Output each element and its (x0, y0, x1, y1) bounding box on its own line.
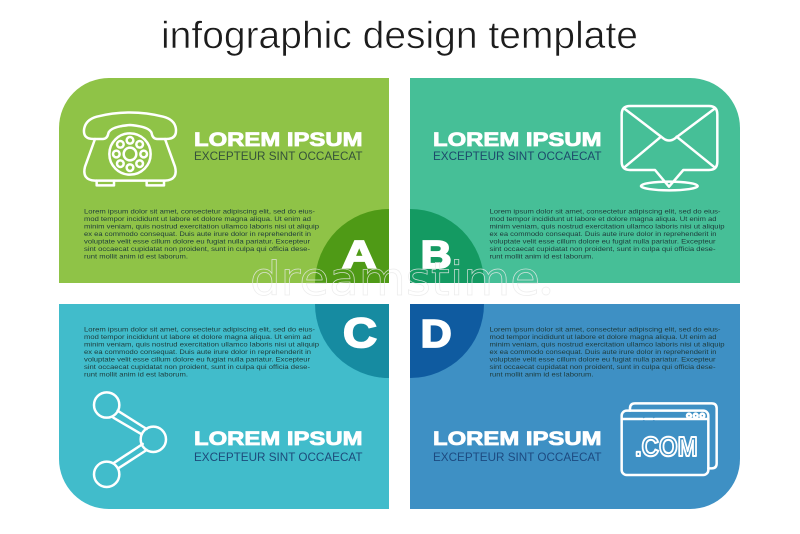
body text C: sint occaecat cupidatat non proident, sunt in culpa qui officia dese- (84, 364, 310, 371)
body text D: voluptate velit esse cillum dolore eu fugiat nulla pariatur. Excepteur (490, 356, 716, 364)
body text A: voluptate velit esse cillum dolore eu fugiat nulla pariatur. Excepteur (84, 238, 311, 246)
body text B (490, 208, 725, 260)
body text A: runt mollit anim id est laborum. (84, 254, 188, 260)
body text B: runt mollit anim id est laborum. (490, 254, 594, 260)
body text C: voluptate velit esse cillum dolore eu fugiat nulla pariatur. Excepteur (84, 356, 311, 364)
watermark: dreamstime (250, 252, 540, 306)
body text C (84, 326, 319, 378)
body text D: runt mollit anim id est laborum. (490, 372, 594, 378)
icon: share nodes (94, 392, 166, 487)
heading D: LOREM IPSUM (433, 428, 602, 450)
badge letter B: B (421, 234, 452, 277)
panel: D (410, 304, 740, 509)
body text C: Lorem ipsum dolor sit amet, consectetur adipiscing elit, sed do eius- (84, 326, 315, 334)
title: infographic design template (161, 15, 638, 57)
body text C: runt mollit anim id est laborum. (84, 372, 188, 378)
panel: C (59, 304, 389, 509)
body text C: mod tempor incididunt ut labore et dolore magna aliqua. Ut enim ad (84, 334, 311, 341)
heading B: LOREM IPSUM (433, 129, 602, 151)
icon: .com browser window: .COM (635, 431, 698, 462)
body text D: mod tempor incididunt ut labore et dolore magna aliqua. Ut enim ad (490, 334, 717, 341)
body text A: Lorem ipsum dolor sit amet, consectetur adipiscing elit, sed do eius- (84, 208, 315, 216)
icon: envelope pin (622, 106, 717, 190)
body text B: sint occaecat cupidatat non proident, sunt in culpa qui officia dese- (490, 246, 716, 253)
body text A: ex ea commodo consequat. Duis aute irure dolor in reprehenderit in (84, 231, 311, 238)
panel: B (410, 78, 740, 283)
badge letter A: A (342, 234, 376, 277)
badge letter C: C (343, 309, 377, 356)
badge circle B (410, 209, 484, 283)
subheading A: EXCEPTEUR SINT OCCAECAT (194, 151, 362, 163)
panel: A (59, 78, 389, 283)
body text A: mod tempor incididunt ut labore et dolore magna aliqua. Ut enim ad (84, 216, 311, 223)
heading A: LOREM IPSUM (194, 129, 362, 151)
body text A: minim veniam, quis nostrud exercitation ullamco laboris nisi ut aliquip (84, 224, 319, 230)
body text B: mod tempor incididunt ut labore et dolore magna aliqua. Ut enim ad (490, 216, 717, 223)
badge circle C (315, 304, 389, 378)
body text C: minim veniam, quis nostrud exercitation ullamco laboris nisi ut aliquip (84, 342, 319, 348)
subheading B: EXCEPTEUR SINT OCCAECAT (433, 151, 602, 163)
badge circle D (410, 304, 484, 378)
body text B: voluptate velit esse cillum dolore eu fugiat nulla pariatur. Excepteur (490, 238, 716, 246)
panel A background (59, 78, 389, 283)
icon: .com browser window (622, 403, 717, 475)
body text A: sint occaecat cupidatat non proident, sunt in culpa qui officia dese- (84, 246, 310, 253)
body text B: ex ea commodo consequat. Duis aute irure dolor in reprehenderit in (490, 231, 717, 238)
body text D: minim veniam, quis nostrud exercitation ullamco laboris nisi ut aliquip (490, 342, 725, 348)
panel C background (59, 304, 389, 509)
subheading D: EXCEPTEUR SINT OCCAECAT (433, 452, 602, 464)
icon: telephone (84, 112, 176, 185)
body text C: ex ea commodo consequat. Duis aute irure dolor in reprehenderit in (84, 349, 311, 356)
body text B: Lorem ipsum dolor sit amet, consectetur adipiscing elit, sed do eius- (490, 208, 720, 216)
body text D (490, 326, 725, 378)
panel D background (410, 304, 740, 509)
subheading C: EXCEPTEUR SINT OCCAECAT (194, 452, 362, 464)
body text B: minim veniam, quis nostrud exercitation ullamco laboris nisi ut aliquip (490, 224, 725, 230)
body text D: Lorem ipsum dolor sit amet, consectetur adipiscing elit, sed do eius- (490, 326, 720, 334)
body text A (84, 208, 319, 260)
heading C: LOREM IPSUM (194, 428, 362, 450)
badge letter D: D (421, 313, 452, 356)
badge circle A (315, 209, 389, 283)
body text D: ex ea commodo consequat. Duis aute irure dolor in reprehenderit in (490, 349, 717, 356)
panel B background (410, 78, 740, 283)
body text D: sint occaecat cupidatat non proident, sunt in culpa qui officia dese- (490, 364, 716, 371)
